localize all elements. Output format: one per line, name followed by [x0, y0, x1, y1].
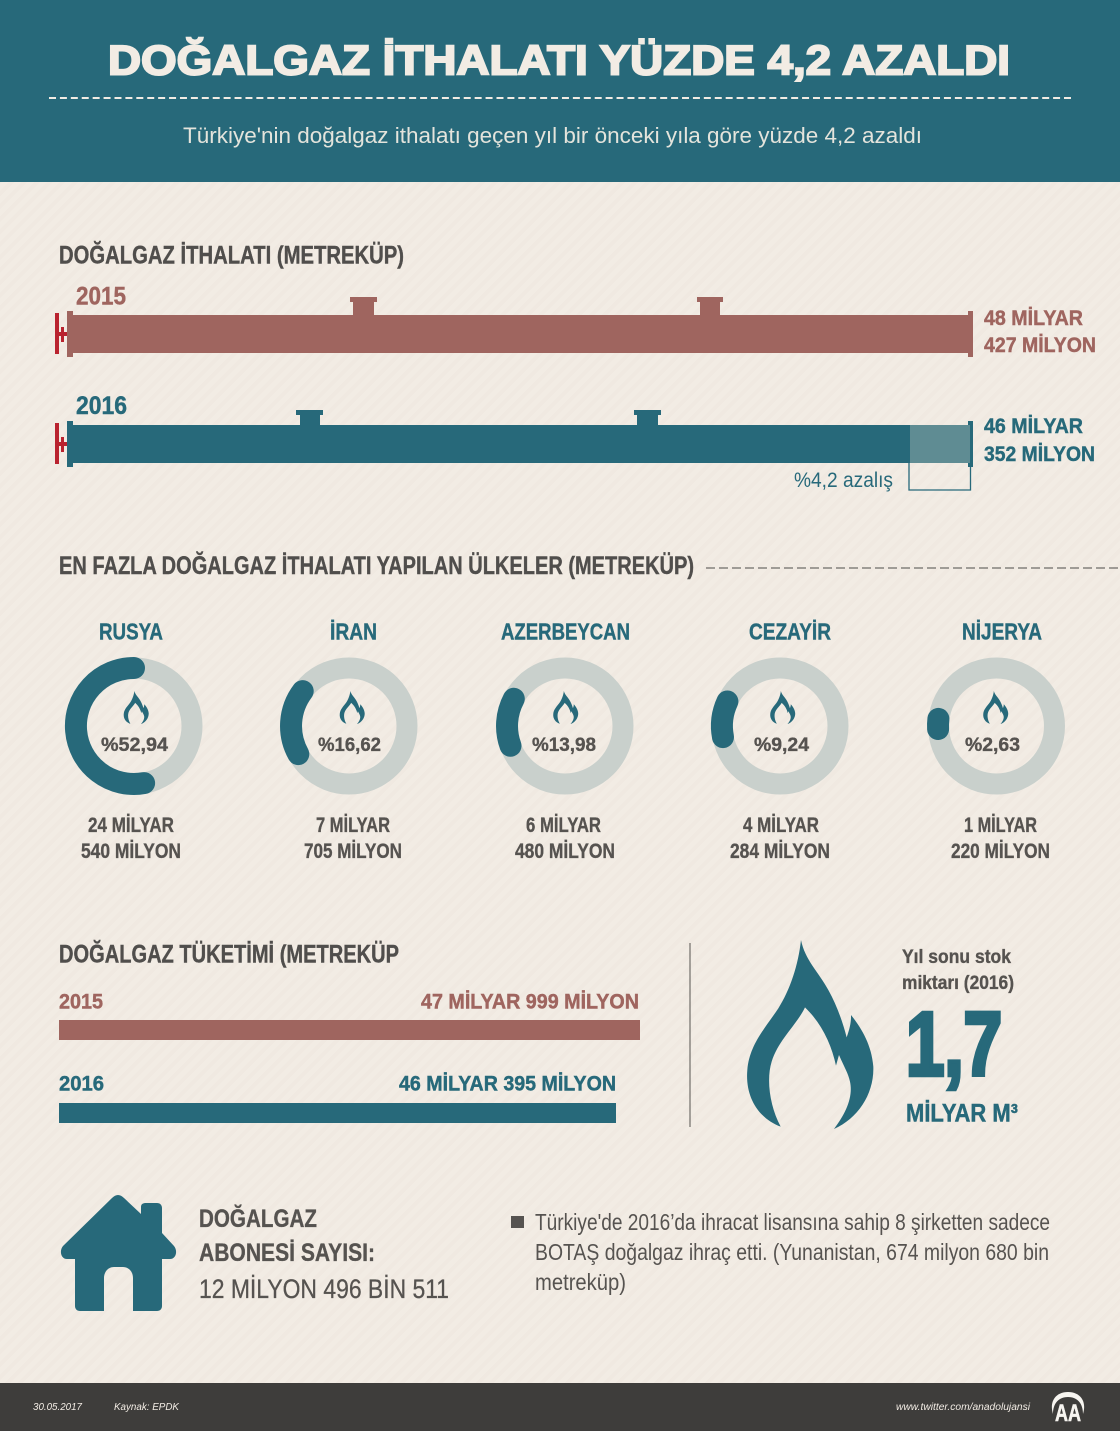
- bar chart: consumption: [59, 990, 640, 1123]
- note with bullet: [511, 1209, 1050, 1295]
- footer: Kaynak: EPDK: [114, 1402, 180, 1413]
- stock callout: miktarı (2016): [902, 973, 1014, 994]
- icon: flame: [340, 691, 365, 724]
- country: Rusya: %52,94: [101, 735, 168, 756]
- stock callout: [902, 947, 1018, 1128]
- icon: house: [61, 1195, 176, 1311]
- country: İran: 7 MİLYAR: [316, 814, 390, 837]
- icon: flame: [553, 691, 578, 724]
- donut Rusya: [76, 668, 192, 784]
- subscribers text: 12 MİLYON 496 BİN 511: [199, 1273, 449, 1304]
- pipe 2016: [67, 410, 973, 467]
- note with bullet: metreküp): [535, 1269, 626, 1295]
- country: Azerbeycan: 480 MİLYON: [515, 840, 615, 863]
- country: Cezayir: %9,24: [754, 735, 809, 756]
- bar 2015: 47 MİLYAR 999 MİLYON: [421, 990, 639, 1014]
- value 2015: 48 MİLYAR: [984, 306, 1083, 330]
- logo: AA: AA: [1055, 1400, 1081, 1427]
- pipe chart: 2015: [55, 282, 1096, 357]
- icon: flame: [770, 691, 795, 724]
- value 2016: 46 MİLYAR: [984, 414, 1083, 438]
- bar 2016: 2016: [59, 1072, 104, 1096]
- country: Azerbeycan: %13,98: [532, 735, 596, 756]
- value 2016: 352 MİLYON: [984, 442, 1095, 466]
- valve 2015: [55, 313, 67, 354]
- title: DOĞALGAZ İTHALATI YÜZDE 4,2 AZALDI: [108, 36, 1010, 84]
- decrease label: %4,2 azalış: [794, 469, 893, 492]
- country: İran: %16,62: [318, 735, 381, 756]
- footer: 30.05.2017: [33, 1402, 82, 1413]
- donut Azerbeycan: [507, 668, 623, 784]
- footer: www.twitter.com/anadolujansi: [896, 1402, 1031, 1413]
- donut Cezayir: [722, 668, 838, 784]
- country: Rusya: RUSYA: [99, 618, 163, 644]
- donut Nijerya: [938, 668, 1054, 784]
- country: Cezayir: 4 MİLYAR: [743, 814, 819, 837]
- bar 2016: [59, 1072, 616, 1123]
- value 2016: [984, 414, 1095, 466]
- heading: imports: DOĞALGAZ İTHALATI (METREKÜP): [59, 240, 404, 270]
- year label 2015: 2015: [76, 282, 126, 310]
- logo: AA: [1052, 1392, 1084, 1427]
- heading: countries: EN FAZLA DOĞALGAZ İTHALATI YAPILAN ÜLKELER (METREKÜP): [59, 551, 694, 580]
- value 2015: [984, 306, 1096, 357]
- subscribers text: ABONESİ SAYISI:: [199, 1239, 375, 1267]
- bar 2016: 46 MİLYAR 395 MİLYON: [399, 1072, 616, 1096]
- header band: [0, 0, 1120, 182]
- country: Nijerya: %2,63: [965, 735, 1020, 756]
- country: Nijerya: NİJERYA: [962, 618, 1042, 644]
- footer: [0, 1383, 1120, 1431]
- country: Nijerya: 220 MİLYON: [951, 840, 1050, 863]
- country: İran: İRAN: [330, 618, 377, 644]
- country: Nijerya: [938, 618, 1054, 863]
- country: Rusya: 540 MİLYON: [81, 840, 181, 863]
- country: Cezayir: [722, 618, 838, 863]
- country: Nijerya: 1 MİLYAR: [964, 814, 1037, 837]
- value 2015: 427 MİLYON: [984, 333, 1096, 357]
- country: Cezayir: CEZAYİR: [749, 618, 831, 644]
- pipe 2015: [67, 297, 973, 357]
- pipe chart: 2016: [55, 392, 1095, 492]
- stock value: 1,7: [906, 995, 1002, 1095]
- year label 2016: 2016: [76, 392, 127, 420]
- country: Azerbeycan: AZERBEYCAN: [501, 618, 630, 644]
- bar 2015: [59, 990, 640, 1040]
- stock callout: MİLYAR M³: [906, 1100, 1018, 1128]
- subtitle: Türkiye'nin doğalgaz ithalatı geçen yıl bir önceki yıla göre yüzde 4,2 azaldı: [183, 123, 922, 148]
- country: Rusya: 24 MİLYAR: [88, 814, 174, 837]
- country: İran: [291, 618, 407, 863]
- country: İran: 705 MİLYON: [304, 840, 402, 863]
- country: Rusya: [76, 618, 192, 863]
- icon: flame: [983, 691, 1008, 724]
- bar 2015: 2015: [59, 990, 103, 1014]
- donut İran: [291, 668, 407, 784]
- country: Azerbeycan: 6 MİLYAR: [526, 814, 601, 837]
- stock callout: Yıl sonu stok: [902, 947, 1011, 968]
- subscribers text: DOĞALGAZ: [199, 1204, 317, 1233]
- decrease bracket: [909, 463, 970, 490]
- country: Cezayir: 284 MİLYON: [730, 840, 830, 863]
- decrease segment: [910, 425, 970, 463]
- subscribers text: [199, 1204, 449, 1304]
- icon: large flame: [747, 940, 873, 1129]
- heading: consumption: DOĞALGAZ TÜKETİMİ (METREKÜP: [59, 940, 399, 968]
- valve 2016: [55, 423, 67, 464]
- country: Azerbeycan: [501, 618, 630, 863]
- icon: flame: [124, 691, 149, 724]
